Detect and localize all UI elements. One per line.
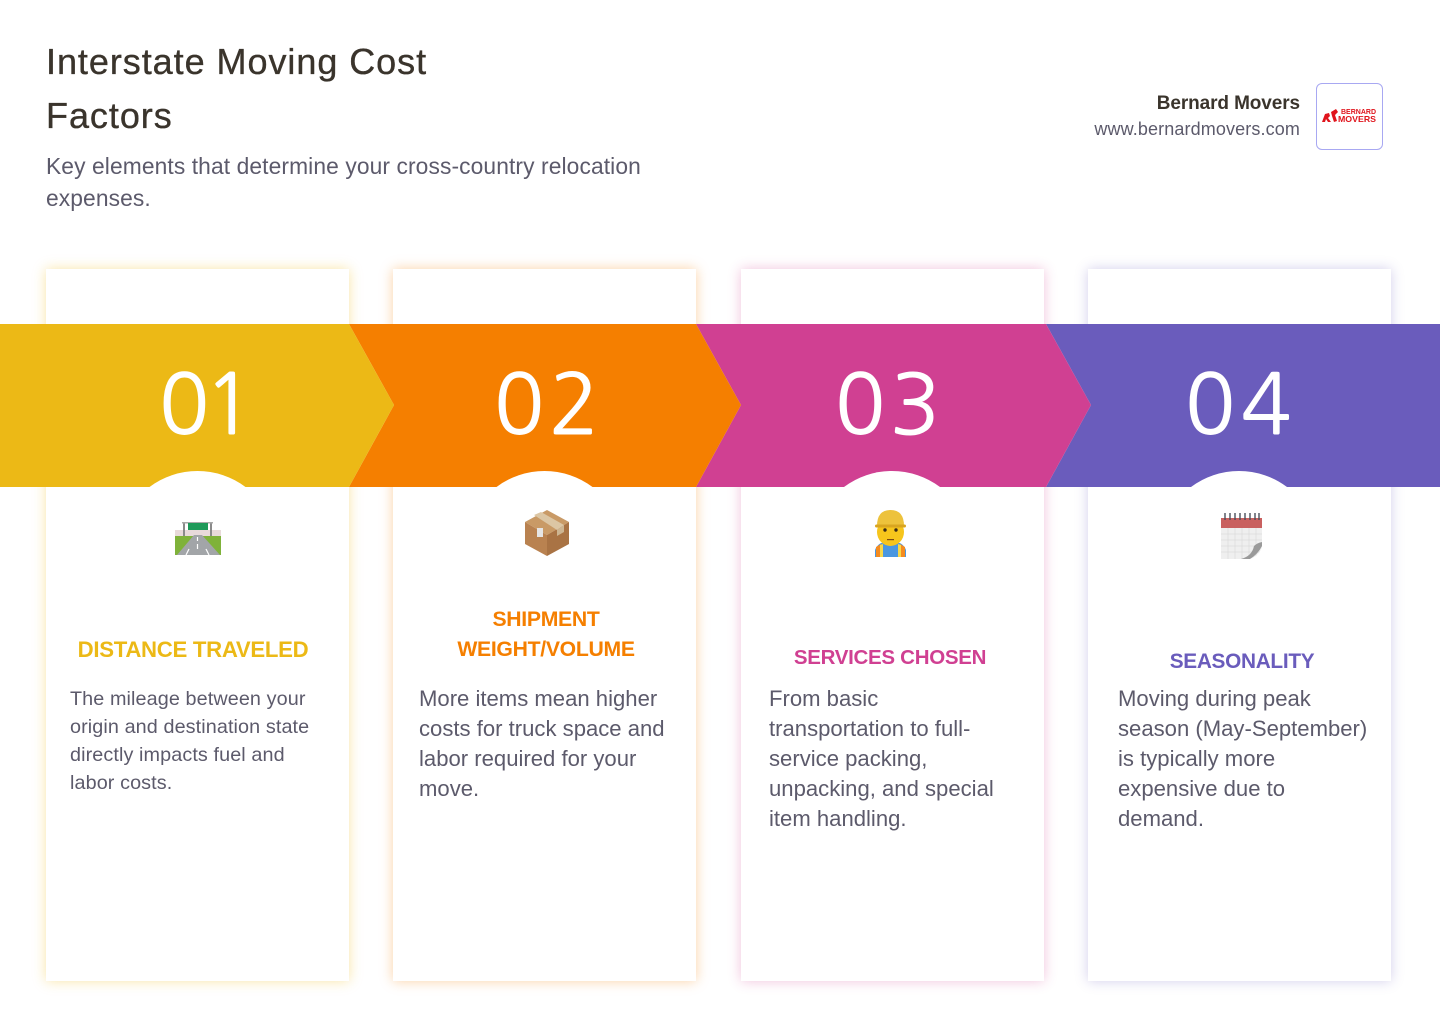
subtitle bbox=[46, 153, 641, 211]
brand logo bbox=[1316, 83, 1383, 150]
panel: card 3 background bbox=[741, 269, 1044, 981]
circle 4 bbox=[1191, 471, 1287, 487]
circle 2 bbox=[496, 471, 592, 487]
panel: card 1 background bbox=[46, 269, 349, 981]
title: Interstate Moving Cost bbox=[46, 41, 427, 82]
text: distance traveled: origin and destination state bbox=[70, 716, 309, 738]
icon: construction worker bbox=[875, 510, 906, 557]
text: distance traveled: directly impacts fuel and bbox=[70, 744, 285, 766]
subtitle: expenses. bbox=[46, 185, 151, 211]
circle 1 bbox=[150, 471, 246, 487]
title bbox=[46, 41, 427, 136]
subtitle: Key elements that determine your cross-country relocation bbox=[46, 153, 641, 179]
text: services chosen: item handling. bbox=[769, 806, 907, 831]
heading: services chosen: SERVICES CHOSEN bbox=[794, 646, 986, 669]
text: seasonality: demand. bbox=[1118, 806, 1204, 831]
title: Factors bbox=[46, 95, 173, 136]
text: services chosen: transportation to full- bbox=[769, 716, 970, 741]
number 02: 02 bbox=[494, 363, 599, 446]
number 01: 01 bbox=[159, 363, 254, 446]
brand logo: MOVERS bbox=[1338, 114, 1376, 124]
icon: package box bbox=[525, 510, 569, 556]
brand name: Bernard Movers bbox=[1157, 93, 1300, 114]
text: distance traveled: The mileage between your bbox=[70, 688, 306, 710]
panel: card 2 background bbox=[393, 269, 696, 981]
text: services chosen: service packing, bbox=[769, 746, 927, 771]
text: seasonality: is typically more bbox=[1118, 746, 1275, 771]
text: services chosen: unpacking, and special bbox=[769, 776, 994, 801]
text: shipment weight: costs for truck space and bbox=[419, 716, 665, 741]
arrow 4 bbox=[1046, 324, 1440, 487]
text: seasonality: season (May-September) bbox=[1118, 716, 1367, 741]
brand website: www.bernardmovers.com bbox=[1094, 119, 1300, 139]
number 04: 04 bbox=[1185, 363, 1291, 446]
arrow 1 bbox=[0, 324, 394, 487]
heading: seasonality: SEASONALITY bbox=[1170, 650, 1314, 673]
icon: calendar bbox=[1221, 513, 1262, 559]
text: distance traveled: labor costs. bbox=[70, 772, 172, 794]
heading: shipment weight bbox=[457, 608, 635, 661]
text: seasonality: expensive due to bbox=[1118, 776, 1285, 801]
text: shipment weight: labor required for your bbox=[419, 746, 636, 771]
text: shipment weight bbox=[419, 686, 665, 801]
text: seasonality: Moving during peak bbox=[1118, 686, 1311, 711]
text: services chosen bbox=[769, 686, 994, 831]
heading: shipment weight: SHIPMENT bbox=[492, 608, 600, 631]
text: shipment weight: move. bbox=[419, 776, 479, 801]
panel: card 4 background bbox=[1088, 269, 1391, 981]
icon: highway bbox=[175, 522, 221, 555]
circle 3 bbox=[844, 471, 940, 487]
arrow 3 bbox=[696, 324, 1091, 487]
text: shipment weight: More items mean higher bbox=[419, 686, 657, 711]
arrow 2 bbox=[349, 324, 741, 487]
brand logo: BERNARD bbox=[1341, 109, 1376, 116]
text: seasonality bbox=[1118, 686, 1367, 831]
number 03: 03 bbox=[835, 363, 940, 446]
heading: distance traveled: DISTANCE TRAVELED bbox=[78, 637, 308, 662]
text: services chosen: From basic bbox=[769, 686, 878, 711]
text: distance traveled bbox=[70, 688, 309, 794]
heading: shipment weight: WEIGHT/VOLUME bbox=[457, 638, 635, 661]
